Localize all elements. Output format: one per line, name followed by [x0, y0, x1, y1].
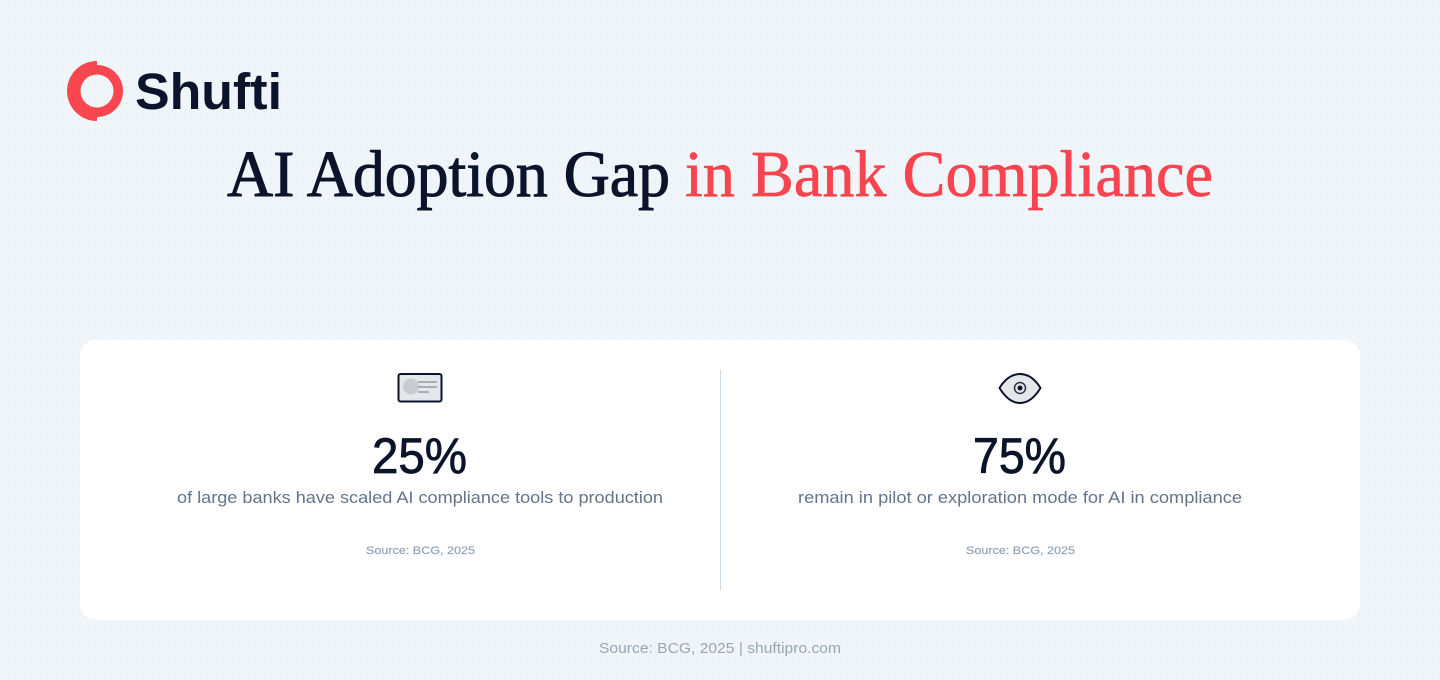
panel divider — [720, 370, 721, 590]
panel: right statistic — [798, 374, 1242, 557]
source: left: Source: BCG, 2025 — [366, 545, 475, 557]
logo wordmark: Shufti — [135, 63, 282, 120]
title: dark part: AI Adoption Gap — [227, 138, 670, 211]
description: left: of large banks have scaled AI compliance tools to production — [177, 488, 663, 507]
title — [227, 138, 1213, 211]
source: right: Source: BCG, 2025 — [966, 545, 1075, 557]
panel: statistics card — [80, 340, 1360, 620]
title: red part: in Bank Compliance — [685, 138, 1213, 211]
icon: ID card — [398, 374, 442, 402]
footer source line: Source: BCG, 2025 | shuftipro.com — [599, 640, 841, 657]
statistic: 25%: 25% — [372, 428, 467, 484]
icon: eye — [1000, 374, 1040, 403]
logo: Shufti — [67, 61, 282, 121]
statistic: 75%: 75% — [973, 428, 1066, 484]
panel: left statistic — [177, 374, 663, 557]
icon: logo ring — [67, 61, 123, 121]
description: right: remain in pilot or exploration mode for AI in compliance — [798, 488, 1242, 507]
